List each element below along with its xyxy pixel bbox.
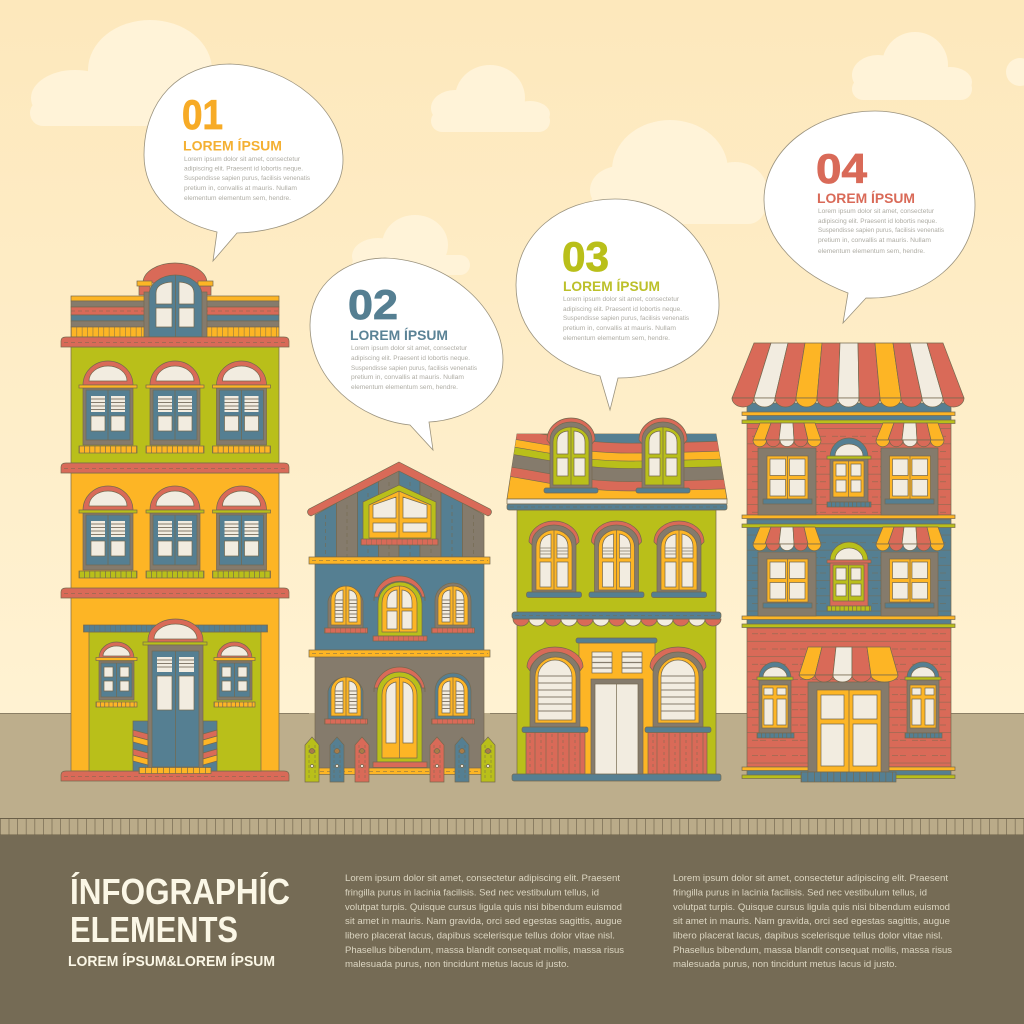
footer text column 1: libero placerat lacus, dapibus scelerisque tellus dolor vitae nisl. [345, 930, 615, 940]
footer text column 2: Phasellus bibendum, massa blandit consequat mollis, massa risus [673, 945, 953, 955]
building 4 middle floor [753, 527, 944, 616]
building 4 floor bands [742, 412, 955, 778]
sky background [0, 0, 1024, 714]
building 2 centre window [373, 576, 427, 641]
building 3 dormers [544, 418, 690, 493]
ground [0, 713, 1024, 819]
building 3 base [512, 774, 721, 781]
body 01: Suspendisse sapien purus, facilisis venenatis [184, 175, 310, 182]
pavement strip [0, 818, 1024, 835]
callout 01 [144, 64, 343, 261]
building 2 floor bands [309, 557, 490, 657]
footer text column 2: malesuada purus, non tincidunt metus lacus id justo. [673, 959, 897, 969]
building 4 roof awning [732, 343, 964, 407]
body 01 [184, 156, 310, 202]
body 04: pretium in, convallis at mauris. Nullam [818, 237, 931, 244]
building 3 upper windows [526, 521, 706, 598]
body 02 [351, 345, 477, 391]
footer text column 2: sit amet in mauris. Nam gravida, orci sed egestas sagittis, augue [673, 916, 950, 926]
bubble 02 [310, 258, 503, 450]
building 4 top floor [753, 423, 944, 515]
building 3 striped roof [506, 434, 728, 510]
body 03: Suspendisse sapien purus, facilisis venenatis [563, 315, 689, 322]
building 2 attic window [361, 485, 438, 545]
body 04 [818, 208, 944, 255]
door [143, 619, 207, 771]
building 1 dormer [137, 263, 213, 337]
body 03: adipiscing elit. Praesent id lobortis neque. [563, 306, 682, 313]
building 1 [61, 263, 289, 781]
side windows [96, 642, 255, 707]
body 02: Suspendisse sapien purus, facilisis venenatis [351, 365, 477, 372]
footer text column 1: volutpat turpis. Quisque cursus ligula quis nisi bibendum euismod [345, 902, 622, 912]
body 01: pretium in, convallis at mauris. Nullam [184, 185, 297, 192]
footer text column 1: malesuada purus, non tincidunt metus lacus id justo. [345, 959, 569, 969]
clouds [30, 20, 1024, 275]
footer text column 2 [673, 873, 953, 969]
body 04: Lorem ipsum dolor sit amet, consectetur [818, 208, 935, 215]
body 02: adipiscing elit. Praesent id lobortis neque. [351, 355, 470, 362]
body 04: Suspendisse sapien purus, facilisis venenatis [818, 227, 944, 234]
building 3 walls [517, 510, 716, 775]
building 2 lower side windows [324, 673, 474, 724]
building 4 [732, 343, 964, 782]
planter stripes [133, 721, 217, 771]
body 01: adipiscing elit. Praesent id lobortis neque. [184, 166, 303, 172]
footer text column 2: fringilla purus in lacinia facilisis. Sed nec vestibulum tellus, id [673, 888, 927, 898]
bubble 04 [764, 111, 975, 323]
body 04: adipiscing elit. Praesent id lobortis neque. [818, 218, 937, 225]
title: ELEMENTS [70, 909, 238, 950]
footer band [0, 835, 1024, 1024]
footer text column 2: libero placerat lacus, dapibus scelerisque tellus dolor vitae nisl. [673, 930, 943, 940]
building 2 [305, 462, 495, 782]
body 01: Lorem ipsum dolor sit amet, consectetur [184, 156, 301, 163]
number 01: 01 [182, 91, 223, 138]
footer text column 2: volutpat turpis. Quisque cursus ligula quis nisi bibendum euismod [673, 902, 950, 912]
building 4 ground-floor side windows [757, 662, 942, 738]
title [68, 871, 290, 970]
body 04: elementum elementum sem, hendre. [818, 248, 925, 255]
body 03: Lorem ipsum dolor sit amet, consectetur [563, 296, 680, 303]
building 2 attic planks [315, 469, 484, 557]
number 03: 03 [562, 233, 609, 280]
title: ÍNFOGRAPHÍC [70, 871, 290, 912]
building 1 cornices [61, 337, 289, 781]
footer text column 1: Phasellus bibendum, massa blandit consequat mollis, massa risus [345, 945, 625, 955]
heading 01: LOREM ÍPSUM [183, 138, 282, 154]
step [139, 768, 211, 774]
body 03: elementum elementum sem, hendre. [563, 335, 670, 342]
bubble 03 [516, 199, 719, 410]
building 3 side windows [522, 647, 711, 774]
body 03 [563, 296, 689, 342]
building 1 first-floor windows [79, 486, 270, 578]
callout 02 [310, 258, 503, 450]
body 02: elementum elementum sem, hendre. [351, 384, 458, 391]
building 4 walls and siding [747, 403, 951, 778]
building 4 ground-floor entrance [799, 647, 898, 782]
footer text column 1 [345, 873, 625, 969]
building 1 attic stripes [71, 296, 279, 337]
heading 02: LOREM ÍPSUM [350, 327, 448, 343]
heading 04: LOREM ÍPSUM [817, 190, 915, 206]
callout 04 [764, 111, 975, 323]
body 02: pretium in, convallis at mauris. Nullam [351, 374, 464, 381]
building 3 [505, 418, 730, 781]
footer text column 2: Lorem ipsum dolor sit amet, consectetur adipiscing elit. Praesent [673, 873, 949, 883]
footer text column 1: Lorem ipsum dolor sit amet, consectetur adipiscing elit. Praesent [345, 873, 621, 883]
body 01: elementum elementum sem, hendre. [184, 195, 291, 202]
building 1 ground floor [84, 619, 268, 774]
footer text column 1: fringilla purus in lacinia facilisis. Sed nec vestibulum tellus, id [345, 888, 599, 898]
building 2 fence [305, 737, 495, 782]
building 2 walls [315, 564, 484, 769]
number 02: 02 [348, 281, 398, 328]
building 2 upper side windows [324, 583, 474, 633]
building 1 walls [71, 347, 279, 771]
building 1 second-floor windows [79, 361, 270, 453]
heading 03: LOREM ÍPSUM [563, 278, 660, 294]
footer text column 1: sit amet in mauris. Nam gravida, orci sed egestas sagittis, augue [345, 916, 622, 926]
building 3 entrance [576, 638, 657, 775]
building 3 scalloped band [512, 612, 721, 626]
building 2 roof [308, 462, 492, 516]
bubble 01 [144, 64, 343, 261]
body 02: Lorem ipsum dolor sit amet, consectetur [351, 345, 468, 352]
building 2 door [373, 667, 427, 768]
title: LOREM ÍPSUM&LOREM ÍPSUM [68, 953, 275, 970]
callout 03 [516, 199, 719, 410]
body 03: pretium in, convallis at mauris. Nullam [563, 325, 676, 332]
number 04: 04 [816, 145, 868, 192]
